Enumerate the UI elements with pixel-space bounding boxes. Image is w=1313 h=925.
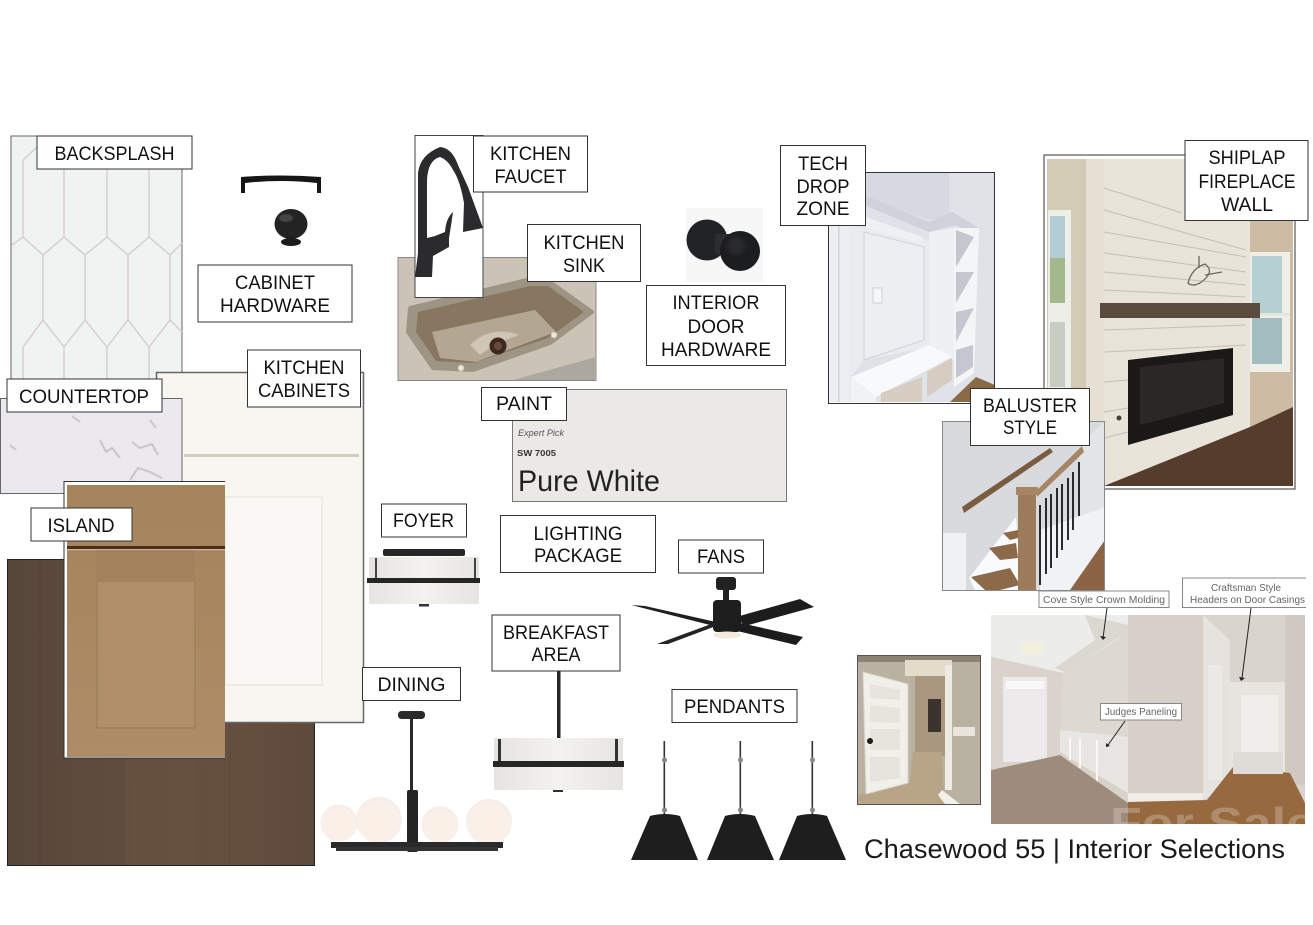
label: island: ISLAND <box>48 516 114 537</box>
icon: breakfast area drum pendant <box>493 671 624 792</box>
photo: baluster staircase <box>942 421 1105 590</box>
label: lighting package <box>500 516 656 572</box>
moodboard canvas <box>0 135 1308 866</box>
icon: interior door knob <box>686 208 763 282</box>
label: breakfast area <box>492 615 620 671</box>
label: backsplash <box>37 136 192 169</box>
label: kitchen faucet: KITCHEN <box>490 144 571 165</box>
label: foyer: FOYER <box>393 511 454 532</box>
label: lighting package: LIGHTING <box>534 524 622 545</box>
label: kitchen cabinets: KITCHEN <box>264 358 344 379</box>
label: tech drop zone <box>780 146 866 226</box>
pendant left <box>631 741 698 860</box>
callout: craftsman door headers: Headers on Door Casings <box>1190 594 1305 606</box>
label: shiplap fireplace wall: FIREPLACE <box>1198 172 1296 193</box>
panel: backsplash tile <box>11 136 182 386</box>
label: paint <box>482 388 566 420</box>
label: interior door hardware <box>646 286 786 366</box>
label: pendants <box>672 690 797 722</box>
panel: kitchen cabinets door sample <box>156 372 364 722</box>
label: dining <box>362 668 460 700</box>
photo: foyer with trim details <box>991 615 1305 824</box>
label: countertop <box>7 379 162 412</box>
label: kitchen cabinets: CABINETS <box>258 381 350 402</box>
callout: judges paneling <box>1100 704 1182 747</box>
label: baluster style <box>970 388 1090 446</box>
label: kitchen faucet <box>474 136 588 192</box>
callout: craftsman door headers <box>1182 578 1306 681</box>
label: fans: FANS <box>697 547 745 568</box>
label: kitchen sink <box>528 224 640 282</box>
photo frame: baluster <box>942 422 1104 590</box>
label: lighting package: PACKAGE <box>534 546 622 567</box>
label: breakfast area: AREA <box>532 645 581 666</box>
panel: island cabinet door sample <box>64 481 225 758</box>
label: shiplap fireplace wall <box>1185 140 1308 220</box>
icon: cabinet hardware pull and knob <box>241 176 321 246</box>
pendant middle <box>707 741 774 860</box>
label: fans <box>678 540 764 573</box>
label: interior door hardware: INTERIOR <box>672 293 760 314</box>
paint: expert pick note: Expert Pick <box>518 428 565 439</box>
paint: color name: Pure White <box>518 465 660 498</box>
label: cabinet hardware: CABINET <box>235 273 315 294</box>
icon: foyer flush mount light <box>367 549 480 606</box>
label: tech drop zone: ZONE <box>796 199 850 220</box>
label: shiplap fireplace wall: SHIPLAP <box>1208 148 1286 169</box>
paint: color code: SW 7005 <box>517 448 556 458</box>
photo: kitchen sink <box>398 258 596 380</box>
icon: ceiling fan <box>631 577 814 645</box>
photo frame: interior door <box>858 656 980 804</box>
label: shiplap fireplace wall: WALL <box>1221 195 1273 216</box>
photo watermark: For Sale <box>1110 799 1313 848</box>
label: pendants: PENDANTS <box>684 697 785 718</box>
panel: flooring sample <box>8 560 314 866</box>
photo: tech drop zone mudroom <box>828 172 995 403</box>
label: countertop: COUNTERTOP <box>19 387 149 408</box>
panel: countertop sample <box>0 398 182 494</box>
photo: interior door <box>857 655 980 804</box>
label: cabinet hardware: HARDWARE <box>220 296 330 317</box>
callout: cove crown molding: Cove Style Crown Molding <box>1043 594 1165 606</box>
label: kitchen sink: SINK <box>563 256 605 277</box>
photo: shiplap fireplace wall <box>1044 155 1295 489</box>
label: island <box>31 508 132 541</box>
label: foyer <box>382 504 466 537</box>
label: dining: DINING <box>378 675 446 696</box>
callout: craftsman door headers: Craftsman Style <box>1211 582 1281 594</box>
callout: judges paneling: Judges Paneling <box>1105 706 1177 718</box>
pendant right <box>779 741 846 860</box>
panel: paint swatch <box>512 390 786 502</box>
label: tech drop zone: TECH <box>798 154 848 175</box>
label: tech drop zone: DROP <box>796 177 850 198</box>
label: breakfast area: BREAKFAST <box>503 623 609 644</box>
label: kitchen cabinets <box>248 350 360 407</box>
icon: pendant lights <box>631 741 846 860</box>
label: cabinet hardware <box>198 265 352 322</box>
photo frame: tech drop zone <box>828 172 994 404</box>
label: paint: PAINT <box>496 394 552 415</box>
label: backsplash: BACKSPLASH <box>54 144 174 165</box>
icon: dining chandelier <box>320 711 512 852</box>
label: interior door hardware: HARDWARE <box>661 340 771 361</box>
label: interior door hardware: DOOR <box>688 317 744 338</box>
photo: kitchen faucet <box>415 136 483 298</box>
callout: cove crown molding <box>1039 591 1169 640</box>
label: baluster style: STYLE <box>1003 418 1057 439</box>
label: kitchen sink: KITCHEN <box>544 233 624 254</box>
label: kitchen faucet: FAUCET <box>494 167 567 188</box>
label: baluster style: BALUSTER <box>983 396 1077 417</box>
title: Chasewood 55 | Interior Selections <box>864 834 1285 864</box>
